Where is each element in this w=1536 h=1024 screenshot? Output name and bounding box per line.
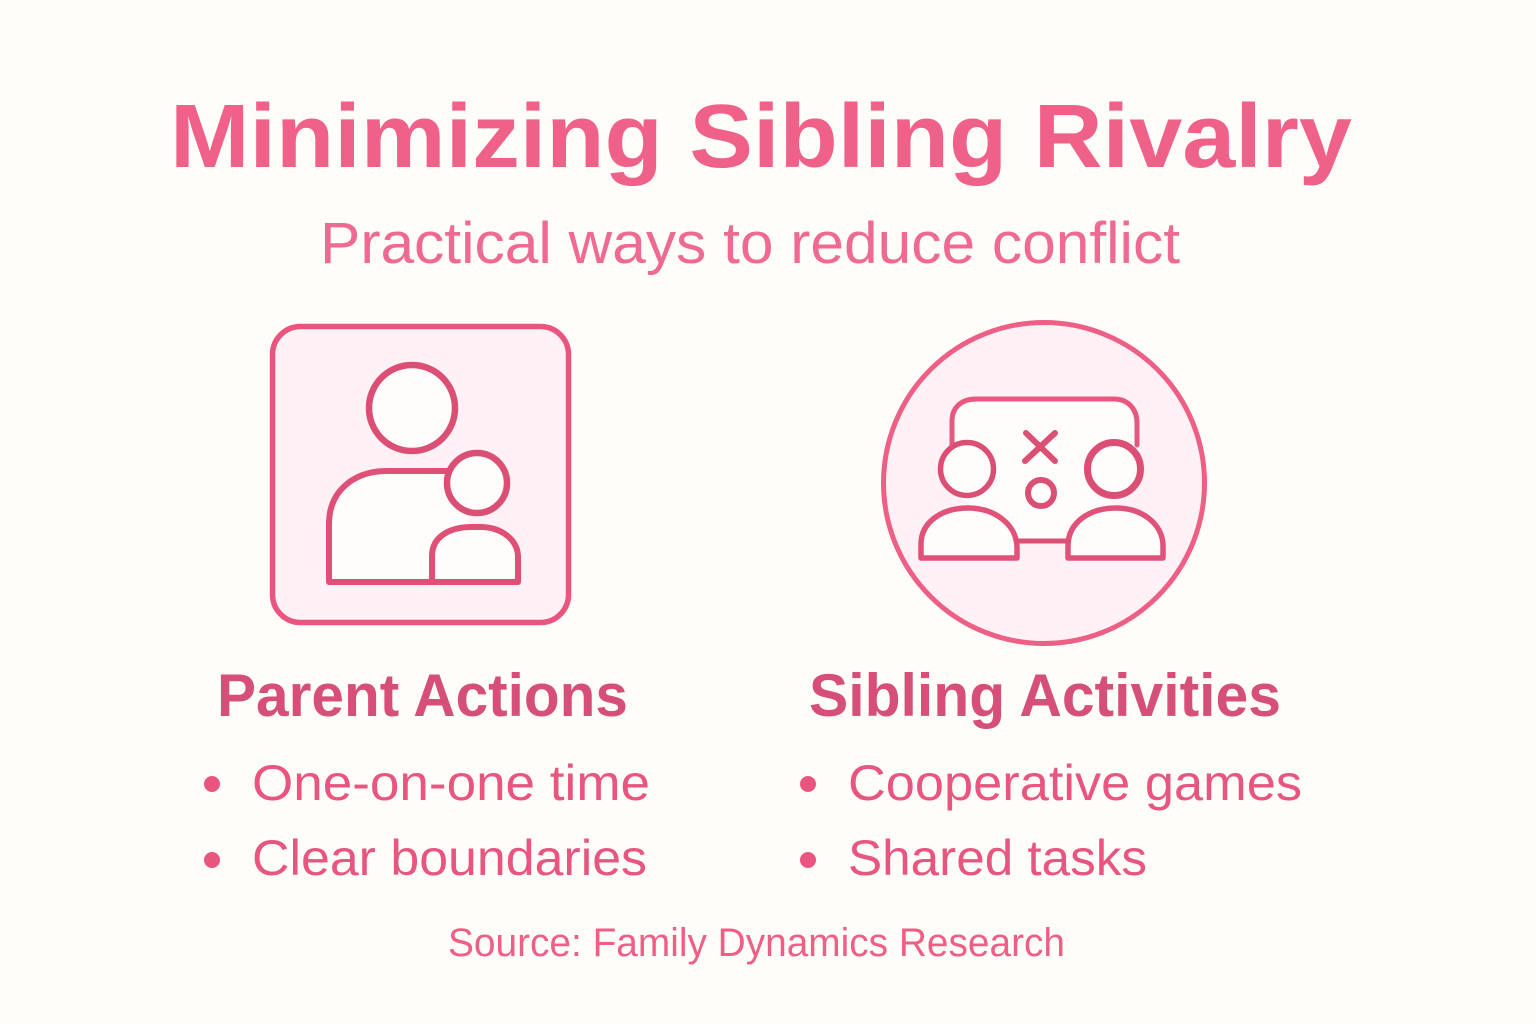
icon: siblings playing a game xyxy=(884,322,1204,644)
bullet xyxy=(204,852,220,868)
bullet xyxy=(800,852,816,868)
game board xyxy=(952,399,1137,541)
parent head xyxy=(369,365,455,451)
item: shared tasks: Shared tasks xyxy=(848,830,1147,886)
title: Minimizing Sibling Rivalry xyxy=(170,87,1352,187)
icon background: circle xyxy=(884,322,1204,644)
bullet xyxy=(800,776,816,792)
item: one-on-one time: One-on-one time xyxy=(252,755,650,811)
item: clear boundaries: Clear boundaries xyxy=(252,830,647,886)
right sibling head xyxy=(1088,442,1140,496)
list: sibling activities xyxy=(800,755,1302,886)
child body xyxy=(432,527,518,582)
parent body xyxy=(329,471,470,582)
right sibling body xyxy=(1068,508,1163,558)
icon: parent and child xyxy=(272,326,568,622)
parent body outline xyxy=(329,471,450,582)
left sibling head xyxy=(940,442,994,496)
source note: Source: Family Dynamics Research xyxy=(448,921,1065,965)
left sibling body xyxy=(921,508,1017,558)
heading: Sibling Activities: Sibling Activities xyxy=(809,662,1281,729)
child head xyxy=(447,453,507,513)
subtitle: Practical ways to reduce conflict xyxy=(320,211,1180,276)
bullet xyxy=(204,776,220,792)
heading: Parent Actions: Parent Actions xyxy=(217,662,628,729)
connecting table line xyxy=(1017,538,1068,544)
O mark xyxy=(1028,480,1054,506)
X mark xyxy=(1025,433,1055,461)
list: parent actions xyxy=(204,755,650,886)
game board outline xyxy=(952,399,1137,445)
item: cooperative games: Cooperative games xyxy=(848,755,1302,811)
icon background: rounded square xyxy=(272,326,568,622)
